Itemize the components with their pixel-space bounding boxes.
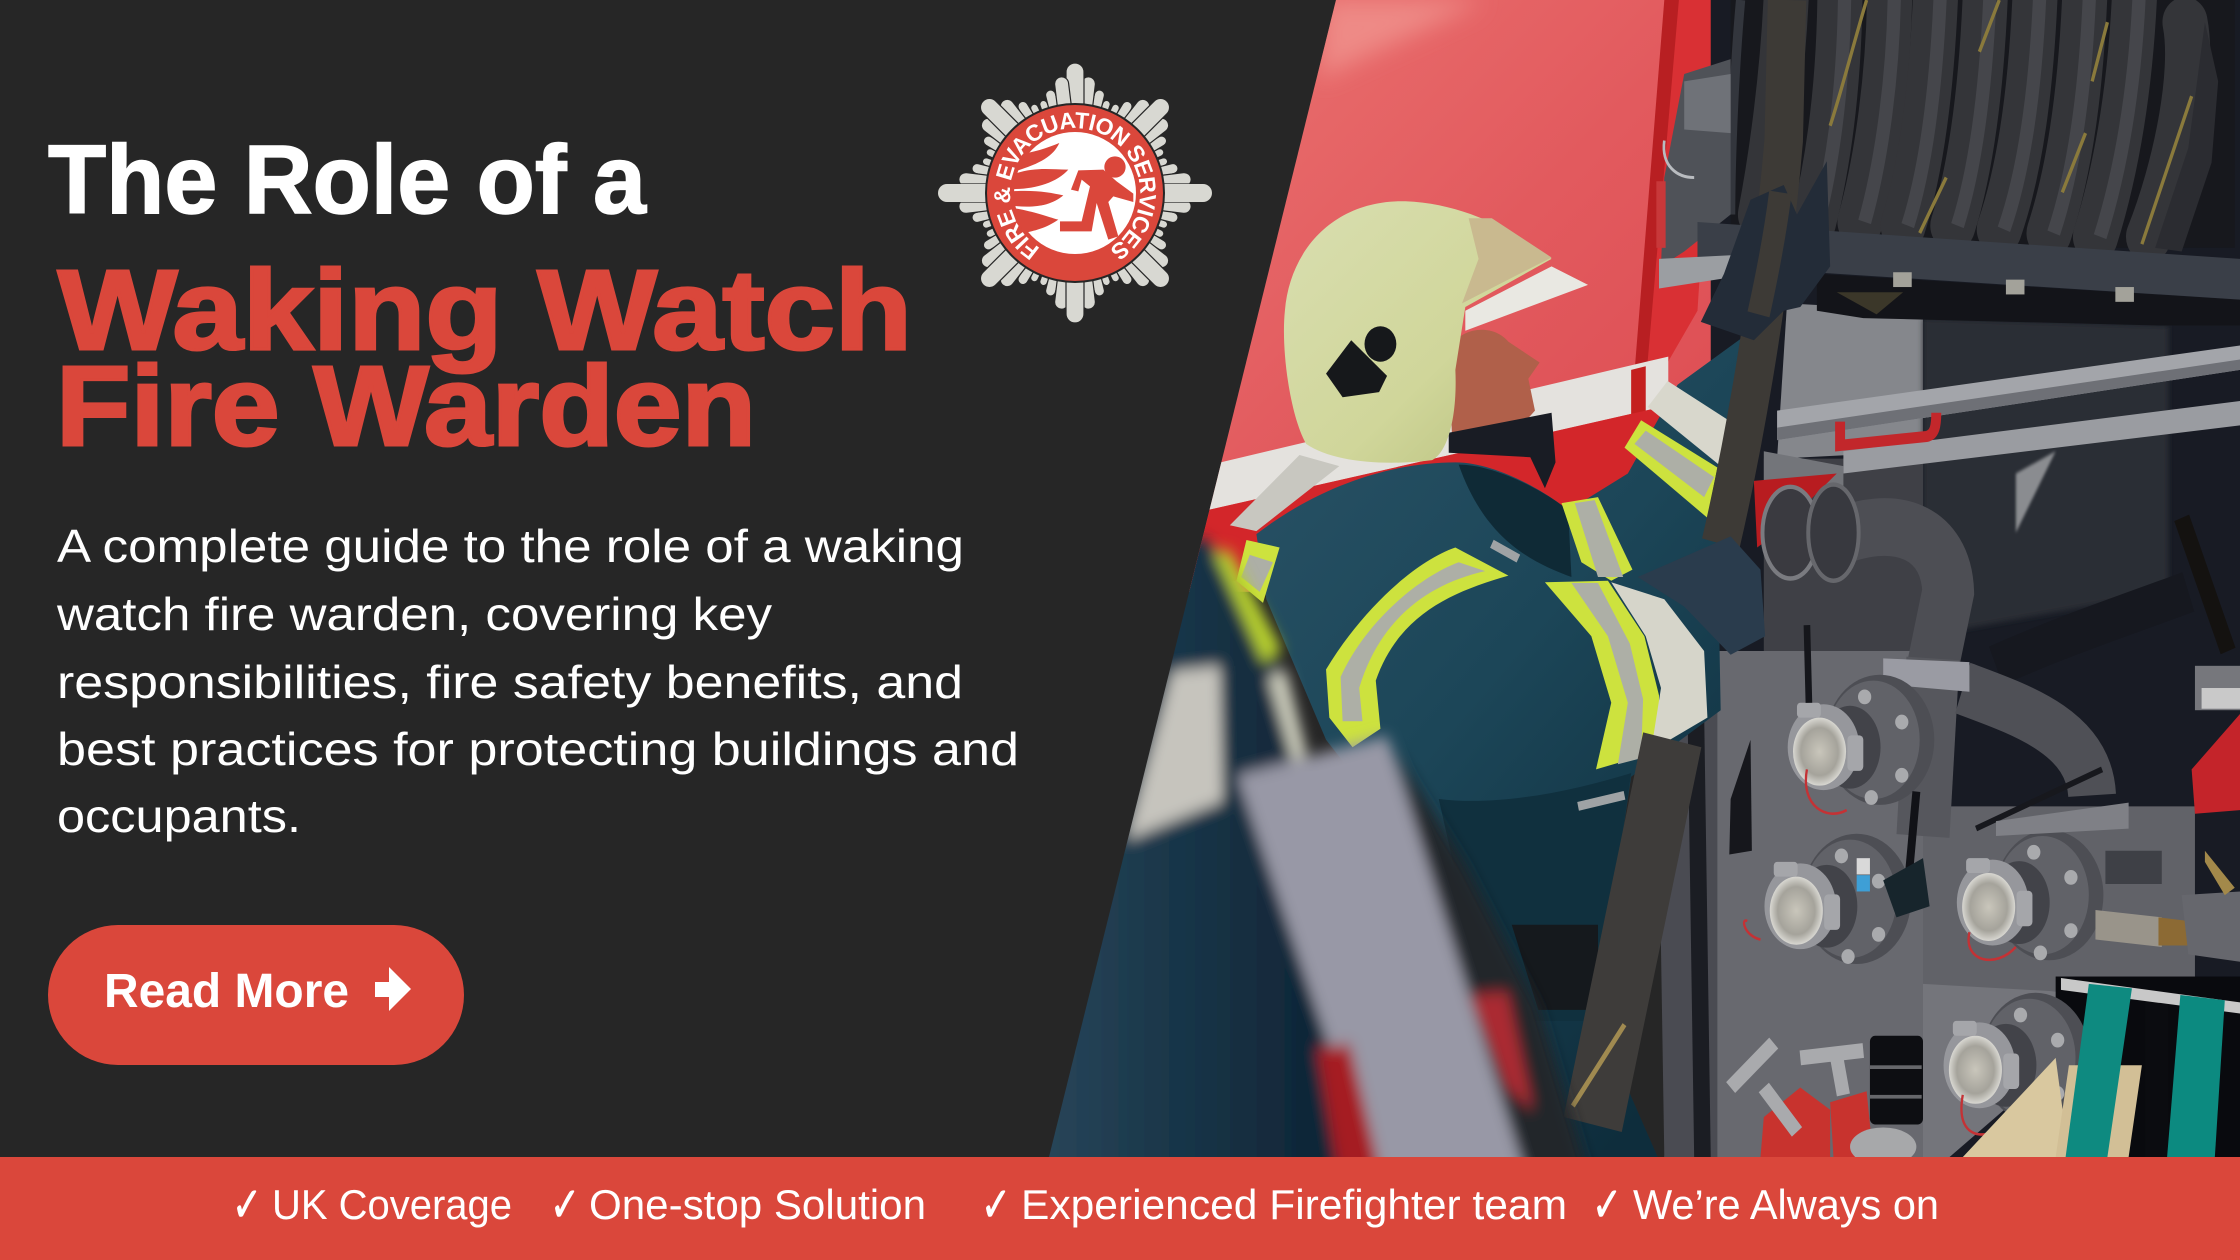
gloves — [1701, 161, 1830, 340]
button: Read More: Read More — [104, 965, 349, 1018]
title line: Waking Watch: Waking Watch — [58, 247, 912, 373]
feature list: ✓ — [981, 1177, 1011, 1233]
hose — [1721, 0, 1787, 544]
button: Read More — [48, 925, 464, 1065]
intro paragraph: watch fire warden, covering key — [56, 588, 772, 640]
icon: arrow — [375, 967, 411, 1011]
helmet — [1284, 201, 1552, 463]
logo: Fire & Evacuation Services badge — [938, 64, 1212, 322]
feature list: Experienced Firefighter team — [1021, 1181, 1567, 1228]
feature list: ✓ — [550, 1177, 580, 1233]
silver rails — [1754, 345, 2240, 547]
jacket — [1256, 329, 1754, 1157]
hose reel — [1656, 0, 2235, 266]
reel support beam — [1659, 222, 2240, 326]
intro paragraph: occupants. — [57, 790, 301, 842]
hose over hand — [1758, 192, 1780, 314]
equipment at bottom: fittings, straps and canvas — [1731, 978, 2240, 1166]
buckles — [1578, 795, 1625, 806]
feature list: One-stop Solution — [589, 1181, 926, 1228]
face — [1449, 330, 1540, 438]
intro paragraph: best practices for protecting buildings and — [57, 723, 1019, 775]
firefighter — [1230, 0, 1830, 1157]
chin strap — [1449, 413, 1556, 488]
belt — [1512, 925, 1598, 1010]
collar — [1230, 455, 1339, 531]
title line: Fire Warden: Fire Warden — [56, 343, 756, 469]
blurred foreground figure — [1049, 528, 1586, 1157]
logo: Fire & Evacuation Services badge: FIRE & EVACUATION SERVICES — [994, 112, 1156, 260]
photo: firefighter working at fire engine — [988, 0, 2240, 1184]
pipework and couplings — [1729, 485, 2240, 1134]
intro paragraph: responsibilities, fire safety benefits, and — [57, 656, 963, 708]
truck body — [1160, 0, 1731, 592]
feature list: UK Coverage — [272, 1181, 512, 1228]
feature list — [232, 1177, 1939, 1233]
feature list: ✓ — [232, 1177, 262, 1233]
machinery background — [1658, 0, 2240, 1157]
feature list: We’re Always on — [1633, 1181, 1939, 1228]
title line: The Role of a: The Role of a — [48, 125, 647, 234]
reflective stripes — [1236, 381, 1731, 769]
intro paragraph: A complete guide to the role of a waking — [57, 520, 964, 572]
intro paragraph — [56, 520, 1019, 842]
feature list: ✓ — [1592, 1177, 1622, 1233]
bottom banner — [0, 1157, 2240, 1260]
